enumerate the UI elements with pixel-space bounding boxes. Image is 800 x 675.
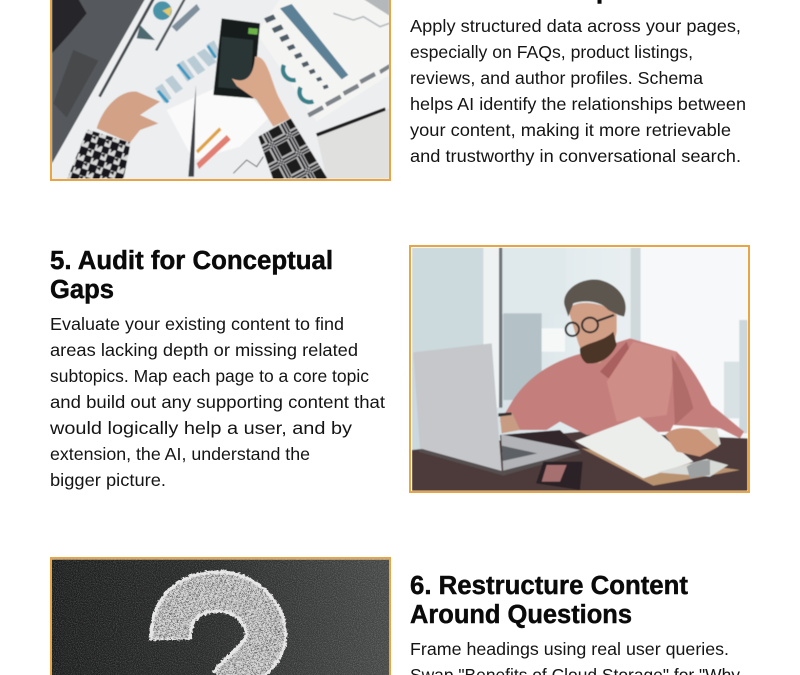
text block: section 4 body: and trustworthy in conversational search. — [410, 146, 741, 166]
text block: section 4 body: your content, making it more retrievable — [410, 120, 731, 140]
text block: section 5 body: bigger picture. — [50, 470, 166, 490]
text block: section 5 body: would logically help a user, and by — [49, 418, 352, 438]
text block: section 6 body — [410, 639, 740, 675]
panel: section 5 text — [49, 247, 385, 490]
heading: section 6: Around Questions — [410, 601, 632, 629]
text block: section 5 body: Evaluate your existing content to find — [50, 314, 344, 334]
heading: section 5 — [50, 247, 333, 304]
text block: section 5 body — [49, 314, 385, 490]
heading: section 5: 5. Audit for Conceptual — [50, 247, 333, 275]
panel: section 6 image of chalk question mark — [51, 558, 390, 675]
text block: section 4 body: reviews, and author profiles. Schema — [410, 68, 703, 88]
text block: section 4 body — [410, 16, 746, 166]
text block: section 4 body: Apply structured data across your pages, — [410, 16, 741, 36]
heading: section 5: Gaps — [50, 276, 114, 304]
panel: section 5 image of man working at laptop — [410, 246, 749, 492]
text block: section 5 body: subtopics. Map each page to a core topic — [50, 366, 369, 386]
image border — [410, 246, 749, 492]
text block: section 6 body: Frame headings using real user queries. — [410, 639, 729, 659]
text block: section 5 body: and build out any supporting content that — [50, 392, 385, 412]
panel: section 6 text — [410, 572, 740, 675]
text block: section 5 body: areas lacking depth or missing related — [50, 340, 358, 360]
heading: section 6: 6. Restructure Content — [410, 572, 689, 600]
image border — [51, 558, 390, 675]
panel: section 4 image of hands over charts and phone — [51, 0, 390, 180]
text block: section 4 body: helps AI identify the relationships between — [410, 94, 746, 114]
text block: section 4 body: especially on FAQs, product listings, — [410, 42, 693, 62]
heading: section 6 — [410, 572, 689, 629]
image border — [51, 0, 390, 180]
panel: section 4 text — [410, 0, 746, 166]
text block: section 5 body: extension, the AI, understand the — [50, 444, 310, 464]
